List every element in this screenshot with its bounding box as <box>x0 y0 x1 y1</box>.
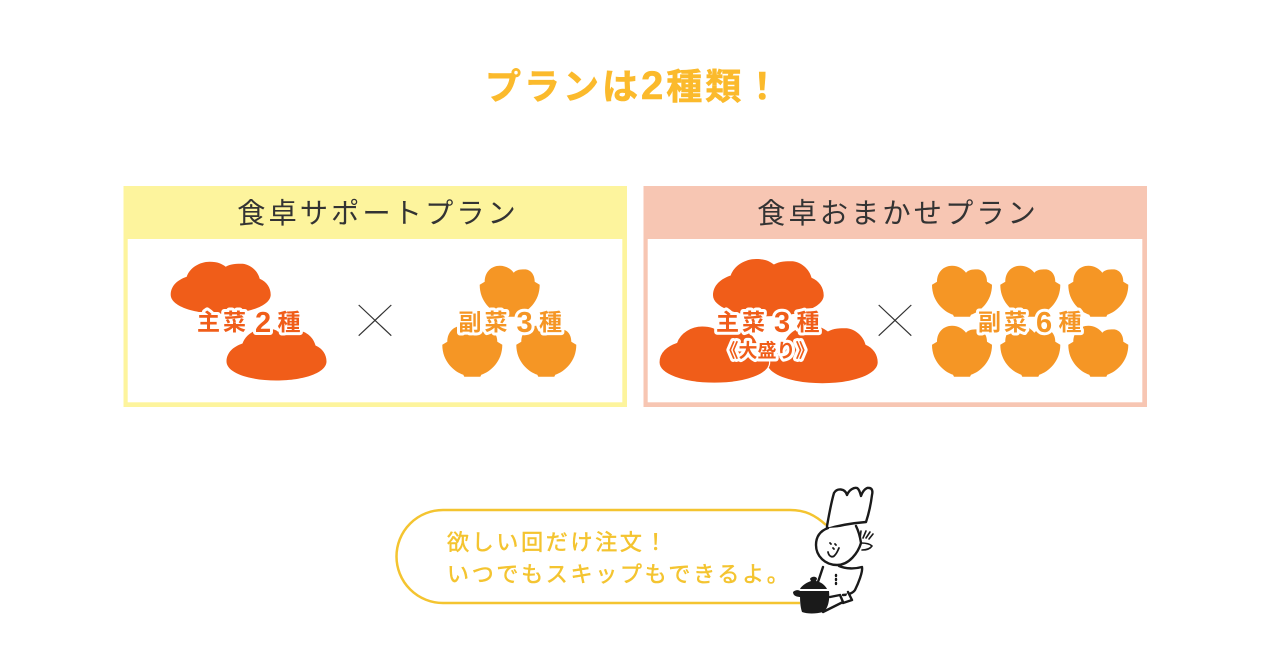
icon: chef with pot <box>793 488 873 614</box>
speech bubble <box>397 510 826 603</box>
bubble text: いつでもスキップもできるよ。 <box>447 562 791 587</box>
side dish label: 副 <box>458 309 482 335</box>
main dish label: 3 <box>774 307 790 339</box>
main dish label: 菜 <box>742 309 765 335</box>
side dish label: 菜 <box>484 309 508 335</box>
bubble text: 欲しい回だけ注文！ <box>447 530 669 555</box>
side dish label: 6 <box>1036 307 1052 339</box>
large portion label: 《大盛り》 <box>719 339 815 362</box>
multiply sign <box>359 305 391 336</box>
main dish label: 菜 <box>223 309 246 335</box>
panel frame <box>124 186 627 407</box>
main dish label: 主 <box>716 309 739 335</box>
main dish plates <box>659 259 878 383</box>
pot handle <box>793 590 801 597</box>
side dish label: 菜 <box>1004 309 1027 335</box>
bubble text <box>447 530 791 587</box>
panel heading: 食卓サポートプラン <box>237 197 519 229</box>
face <box>828 543 839 557</box>
main dish label: 主 <box>197 309 220 335</box>
panel: 食卓おまかせプラン <box>644 186 1147 407</box>
panel heading: 食卓おまかせプラン <box>757 197 1039 229</box>
chef hand and fingers <box>860 531 873 550</box>
side dish bowls <box>932 266 1128 377</box>
side dish label: 種 <box>1058 309 1082 335</box>
side dish label: 副 <box>978 309 1001 335</box>
side dish label: 3 <box>516 307 533 339</box>
pot body <box>800 591 829 614</box>
main dish plates <box>171 262 326 380</box>
main dish label: 種 <box>278 309 300 335</box>
main dish label: 種 <box>796 309 820 335</box>
side dish bowls <box>442 266 576 377</box>
bubble outline <box>397 510 826 603</box>
side dish label: 種 <box>539 309 562 335</box>
chef body <box>818 566 862 595</box>
pot lid <box>800 577 827 589</box>
panel body <box>128 239 622 402</box>
chef sleeve <box>823 592 852 612</box>
main dish label: 2 <box>255 307 271 339</box>
panel frame <box>644 186 1147 407</box>
panel: 食卓サポートプラン <box>124 186 627 407</box>
multiply sign <box>879 305 911 336</box>
panel body <box>648 239 1142 402</box>
title: プランは2種類！ <box>485 64 783 108</box>
chef hat <box>827 488 872 529</box>
pot <box>793 577 829 614</box>
chef head <box>816 526 861 565</box>
